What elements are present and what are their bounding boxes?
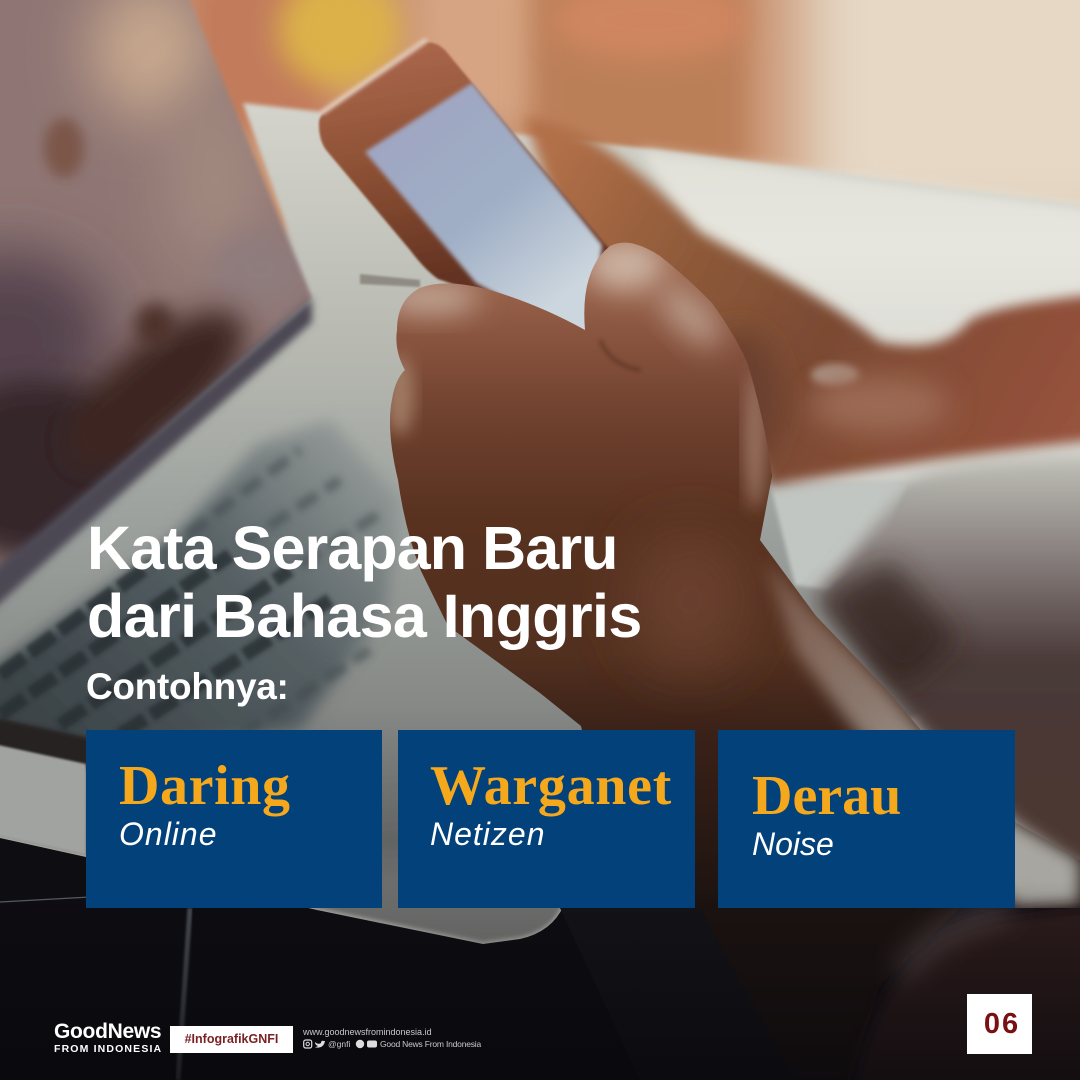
card: Derau xyxy=(718,730,1015,908)
blurred dark device at right xyxy=(816,458,1080,900)
card: Derau: Noise xyxy=(752,826,834,862)
subtitle: Contohnya: xyxy=(86,666,289,707)
blurred warm backdrop xyxy=(0,0,1080,250)
hashtag badge: #InfografikGNFI xyxy=(185,1032,278,1046)
laptop screen xyxy=(0,0,314,569)
card: Derau: Derau xyxy=(752,765,901,827)
thin wire xyxy=(0,897,90,902)
dark table below laptop xyxy=(0,838,1080,1080)
back hand xyxy=(525,118,1080,486)
bottom vignette xyxy=(0,880,1080,1080)
footer logo: FROM INDONESIA xyxy=(54,1043,162,1055)
website and social handles: @gnfi xyxy=(328,1039,350,1049)
page number xyxy=(967,994,1032,1054)
website and social handles: www.goodnewsfromindonesia.id xyxy=(303,1027,432,1037)
card: Daring: Online xyxy=(119,816,218,852)
phone xyxy=(319,41,610,345)
vertical cable xyxy=(178,908,190,1080)
card: Warganet: Netizen xyxy=(430,816,546,852)
social icons: facebook and youtube xyxy=(356,1040,377,1048)
card: Warganet: Warganet xyxy=(430,755,672,817)
page number: 06 xyxy=(984,1008,1020,1040)
laptop hinge band xyxy=(0,298,312,630)
small slot on deck xyxy=(360,274,420,287)
tile behind hand xyxy=(770,482,909,590)
front hand and forearm xyxy=(380,230,1080,920)
social icons: instagram and twitter xyxy=(303,1039,325,1049)
lower shirt and arm shadows xyxy=(560,905,1080,1080)
title xyxy=(87,514,642,650)
title: dari Bahasa Inggris xyxy=(87,582,642,650)
card: Daring xyxy=(86,730,382,908)
laptop deck xyxy=(0,103,1080,942)
laptop front band xyxy=(0,714,90,855)
website and social handles xyxy=(303,1027,482,1049)
card: Daring: Daring xyxy=(119,755,291,817)
website and social handles: Good News From Indonesia xyxy=(380,1039,481,1049)
card: Warganet xyxy=(398,730,695,908)
keyboard xyxy=(0,420,400,762)
hashtag badge xyxy=(170,1026,293,1053)
footer logo xyxy=(54,1020,162,1055)
title: Kata Serapan Baru xyxy=(87,514,618,582)
footer logo: GoodNews xyxy=(54,1020,161,1043)
